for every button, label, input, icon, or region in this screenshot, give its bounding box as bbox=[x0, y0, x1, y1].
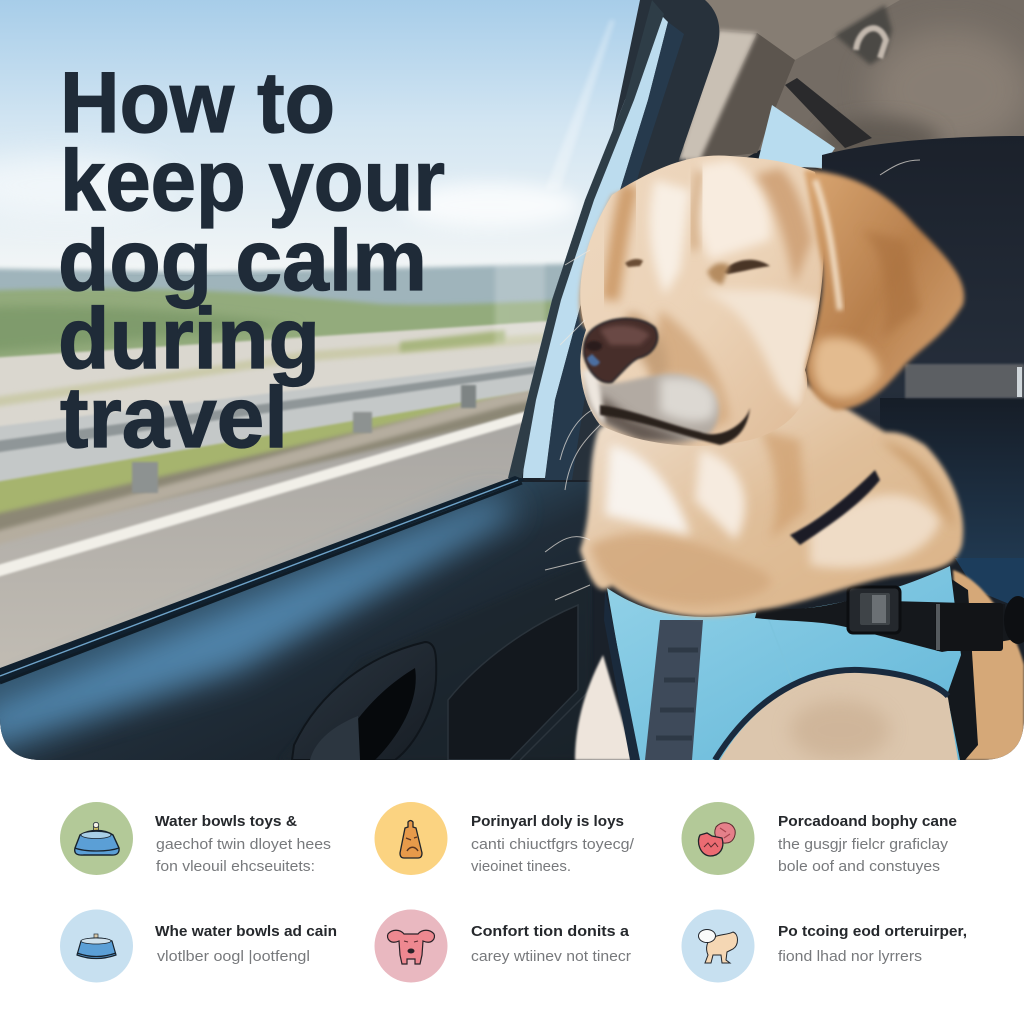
nose bbox=[584, 319, 657, 382]
harness strap and buckle bbox=[755, 587, 1024, 652]
tip 3: chew toys bbox=[682, 802, 957, 875]
guardrail bbox=[0, 360, 536, 494]
title: keep your bbox=[60, 133, 445, 229]
rear fur bbox=[953, 570, 1024, 760]
text block: fon vleouil ehcseuitets: bbox=[156, 859, 315, 875]
text block: fiond lhad nor lyrrers bbox=[778, 949, 922, 965]
whiskers bbox=[545, 160, 920, 600]
title: How to bbox=[60, 55, 335, 151]
back fur under arch bbox=[720, 672, 958, 760]
icon: small dog on blue circle bbox=[682, 910, 754, 982]
icon: chew toys on green circle bbox=[682, 802, 754, 875]
text block: bole oof and constuyes bbox=[778, 859, 940, 875]
title bbox=[58, 55, 445, 466]
door panel bbox=[0, 476, 592, 760]
text block: vieoinet tinees. bbox=[471, 859, 571, 875]
car seat bbox=[820, 136, 1024, 610]
title: during bbox=[58, 291, 320, 387]
icon: pink dog toy on pink circle bbox=[374, 910, 448, 982]
title: dog calm bbox=[58, 213, 427, 309]
tip 2: bottle bbox=[374, 802, 635, 875]
ear left bbox=[576, 186, 624, 332]
title: travel bbox=[60, 370, 288, 466]
grab handle bbox=[835, 5, 892, 65]
door speaker grille bbox=[448, 605, 578, 760]
text block bbox=[471, 837, 635, 875]
icon: water bowl on green circle bbox=[60, 802, 133, 875]
heading: Whe water bowls ad cain bbox=[155, 923, 337, 940]
car roof and pillars bbox=[508, 0, 1024, 480]
head bbox=[580, 156, 824, 446]
side strap bbox=[945, 578, 978, 760]
text block: the gusgjr fielcr graficlay bbox=[778, 837, 949, 853]
tip 5: comfort toy bbox=[374, 910, 631, 982]
rear side window bbox=[757, 105, 835, 168]
hero photo: dog in car bbox=[0, 0, 1024, 760]
heading: Water bowls toys & bbox=[155, 813, 297, 830]
icon: bottle on yellow circle bbox=[374, 802, 448, 875]
dog bbox=[545, 140, 1024, 760]
muzzle bbox=[585, 370, 718, 441]
text block bbox=[156, 837, 331, 875]
text block: canti chiuctfgrs toyecg/ bbox=[471, 837, 635, 853]
white leg fur bbox=[575, 655, 634, 760]
eyes bbox=[625, 259, 770, 285]
text block: gaechof twin dloyet hees bbox=[156, 837, 331, 853]
collar bbox=[790, 470, 880, 545]
tip 4: water bowl bbox=[60, 910, 337, 982]
ear right bbox=[804, 170, 964, 410]
heading: Confort tion donits a bbox=[471, 923, 630, 940]
text block: carey wtiinev not tinecr bbox=[471, 949, 631, 965]
heading: Porinyarl doly is loys bbox=[471, 813, 624, 830]
heading: Po tcoing eod orteruirper, bbox=[778, 923, 967, 940]
text block bbox=[778, 837, 949, 875]
car window landscape bbox=[0, 0, 660, 680]
icon: water bowl on blue circle bbox=[60, 910, 133, 982]
text block: vlotlber oogl |ootfengl bbox=[157, 949, 310, 965]
tip 6: small dog bbox=[682, 910, 967, 982]
harness vest bbox=[604, 566, 961, 760]
mouth bbox=[600, 405, 750, 445]
tip 1: water bowl bbox=[60, 802, 331, 875]
chest fur bbox=[580, 380, 963, 617]
heading: Porcadoand bophy cane bbox=[778, 813, 957, 830]
door handle bbox=[292, 642, 436, 760]
